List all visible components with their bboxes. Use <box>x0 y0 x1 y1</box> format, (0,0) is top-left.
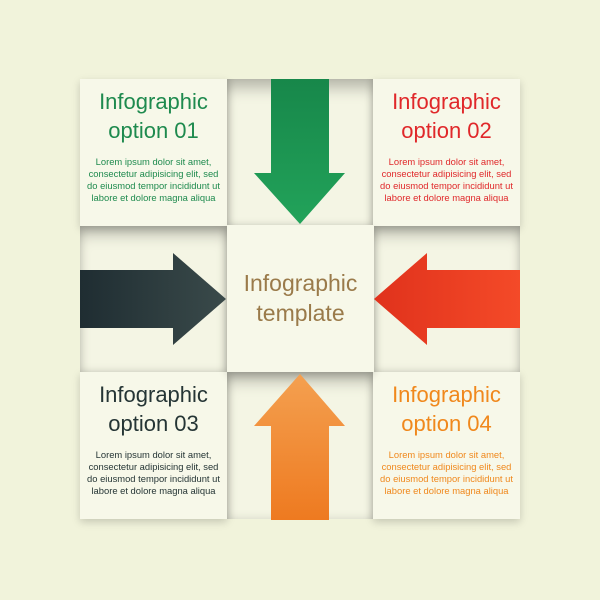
panel: option 04 <box>373 372 520 519</box>
panel: option 04: Infographic <box>392 382 501 407</box>
arrow: red left <box>374 253 520 345</box>
panel: option 03: Infographic <box>99 382 208 407</box>
panel: option 02: Infographic <box>392 89 501 114</box>
arrow: orange up <box>254 374 345 520</box>
panel: option 02: Lorem ipsum dolor sit amet, <box>389 156 504 167</box>
panel: option 03: option 03 <box>108 411 199 436</box>
arrow: green down <box>254 79 345 224</box>
panel: option 01: option 01 <box>108 118 199 143</box>
panel: option 02 <box>373 79 520 226</box>
panel: option 01: Infographic <box>99 89 208 114</box>
panel: option 01: Lorem ipsum dolor sit amet, <box>96 156 211 167</box>
panel: center template: Infographic <box>244 270 357 296</box>
panel: option 04: option 04 <box>401 411 492 436</box>
panel: option 02: do eiusmod tempor incididunt ut <box>380 180 513 191</box>
panel: bottom middle recess <box>227 372 374 519</box>
panel: option 01: labore et dolore magna aliqua <box>91 192 216 203</box>
panel: option 04: labore et dolore magna aliqua <box>384 485 509 496</box>
panel: option 01 <box>80 79 227 226</box>
panel: top middle recess <box>227 79 374 226</box>
panel: option 03: do eiusmod tempor incididunt ut <box>87 473 220 484</box>
panel: option 03: consectetur adipisicing elit, sed <box>89 461 218 472</box>
panel: option 02: option 02 <box>401 118 492 143</box>
arrow: dark right <box>80 253 226 345</box>
panel: option 02: labore et dolore magna aliqua <box>384 192 509 203</box>
panel: option 03 <box>80 372 227 519</box>
panel: option 02: consectetur adipisicing elit, sed <box>382 168 511 179</box>
panel: option 04: consectetur adipisicing elit, sed <box>382 461 511 472</box>
panel: middle left recess <box>80 225 227 372</box>
panel: center template: template <box>256 300 345 326</box>
panel: option 03: Lorem ipsum dolor sit amet, <box>96 449 211 460</box>
panel: option 04: do eiusmod tempor incididunt ut <box>380 473 513 484</box>
panel: middle right recess <box>373 225 520 372</box>
panel: option 01: do eiusmod tempor incididunt ut <box>87 180 220 191</box>
panel: option 03: labore et dolore magna aliqua <box>91 485 216 496</box>
panel: option 01: consectetur adipisicing elit, sed <box>89 168 218 179</box>
panel: center template <box>227 225 374 372</box>
panel: option 04: Lorem ipsum dolor sit amet, <box>389 449 504 460</box>
